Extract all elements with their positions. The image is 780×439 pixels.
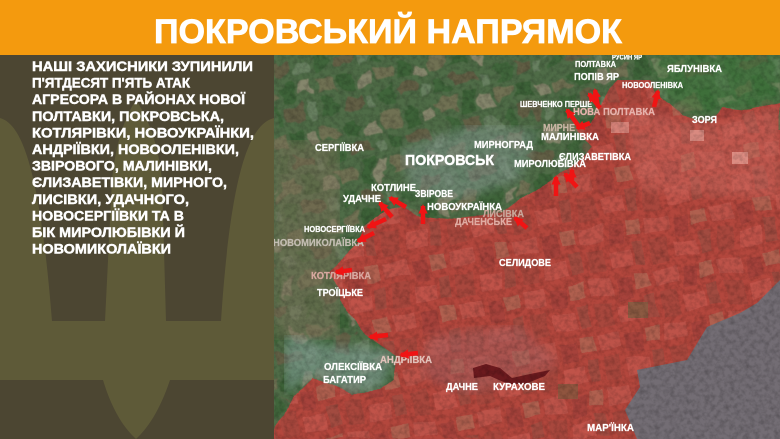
settlement labels: МИРНОГРАД — [474, 140, 533, 151]
settlement labels: ДАЧЕНСЬКЕ — [455, 217, 512, 228]
settlement labels: ПОКРОВСЬК — [405, 152, 495, 169]
panel description text: НОВОСЕРГІЇВКИ ТА В — [32, 208, 184, 223]
panel description text: КОТЛЯРІВКИ, НОВОУКРАЇНКИ, — [32, 125, 254, 140]
terrain tone zones — [274, 55, 780, 395]
settlement labels: МИРОЛЮБІВКА — [514, 159, 586, 170]
title: ПОКРОВСЬКИЙ НАПРЯМОК — [154, 12, 622, 51]
settlement labels: СЕРГІЇВКА — [315, 141, 364, 154]
settlement labels: ЯБЛУНІВКА — [667, 64, 722, 75]
settlement labels: УДАЧНЕ — [343, 194, 381, 205]
panel description text: ЗВІРОВОГО, МАЛИНІВКИ, — [32, 159, 212, 174]
settlement labels: ПОЛТАВКА — [575, 60, 616, 69]
settlement labels: ЛИСІВКА — [483, 209, 524, 220]
panel description text: АНДРІЇВКИ, НОВООЛЕНІВКИ, — [32, 142, 239, 157]
Donetsk urban area — [625, 280, 780, 439]
settlement labels — [273, 54, 722, 434]
panel description text — [32, 59, 254, 257]
panel description text: НОВОМИКОЛАЇВКИ — [32, 242, 171, 257]
settlement labels: ЗОРЯ — [692, 115, 717, 126]
settlement labels: КОТЛЯРІВКА — [311, 271, 371, 282]
panel description text: АГРЕСОРА В РАЙОНАХ НОВОЇ — [32, 92, 246, 107]
settlement labels: НОВОУКРАЇНКА — [427, 200, 502, 213]
map texture — [274, 55, 780, 439]
occupied field patches — [420, 105, 780, 399]
panel description text: ЛИСІВКИ, УДАЧНОГО, — [32, 192, 189, 207]
occupied territory (red zone) — [274, 80, 780, 439]
settlement labels: НОВОМИКОЛАЇВКА — [273, 236, 364, 249]
settlement labels: НОВОСЕРГІЇВКА — [304, 225, 365, 234]
settlement labels: ОЛЕКСІЇВКА — [324, 360, 382, 373]
settlement labels: АНДРІЇВКА — [380, 353, 432, 366]
panel description text: ЄЛИЗАВЕТІВКИ, МИРНОГО, — [32, 175, 227, 190]
settlement labels: НОВООЛЕНІВКА — [622, 81, 683, 90]
red zone base strip — [274, 130, 780, 439]
settlement labels: МАЛИНІВКА — [541, 132, 599, 143]
title banner — [0, 0, 780, 55]
panel description text: НАШІ ЗАХИСНИКИ ЗУПИНИЛИ — [32, 59, 253, 74]
left text panel — [0, 55, 274, 439]
panel description text: ПОЛТАВКИ, ПОКРОВСЬКА, — [32, 109, 224, 124]
settlement labels: ДАЧНЕ — [446, 382, 478, 393]
settlement labels: ШЕВЧЕНКО ПЕРШЕ — [520, 100, 593, 109]
settlement labels: КОТЛИНЕ — [371, 183, 416, 194]
settlement labels: ЗВІРОВЕ — [415, 189, 453, 200]
settlement labels: РУСИН ЯР — [612, 54, 642, 62]
settlement labels: ПОПІВ ЯР — [574, 72, 619, 83]
panel description text: БІК МИРОЛЮБІВКИ Й — [32, 225, 185, 240]
settlement labels: ЄЛИЗАВЕТІВКА — [559, 152, 631, 163]
red attack arrows — [336, 90, 658, 355]
trident emblem — [0, 100, 274, 439]
settlement labels: МАР'ЇНКА — [587, 421, 634, 434]
panel description text: П'ЯТДЕСЯТ П'ЯТЬ АТАК — [32, 76, 191, 91]
settlement labels: ТРОЇЦЬКЕ — [317, 286, 363, 299]
satellite map — [273, 54, 780, 439]
settlement labels: БАГАТИР — [323, 375, 366, 386]
settlement labels: МИРНЕ — [543, 123, 575, 134]
settlement labels: СЕЛИДОВЕ — [499, 258, 551, 269]
settlement labels: КУРАХОВЕ — [493, 382, 545, 393]
Kurakhove reservoir — [473, 364, 550, 384]
settlement labels: НОВА ПОЛТАВКА — [573, 107, 655, 118]
